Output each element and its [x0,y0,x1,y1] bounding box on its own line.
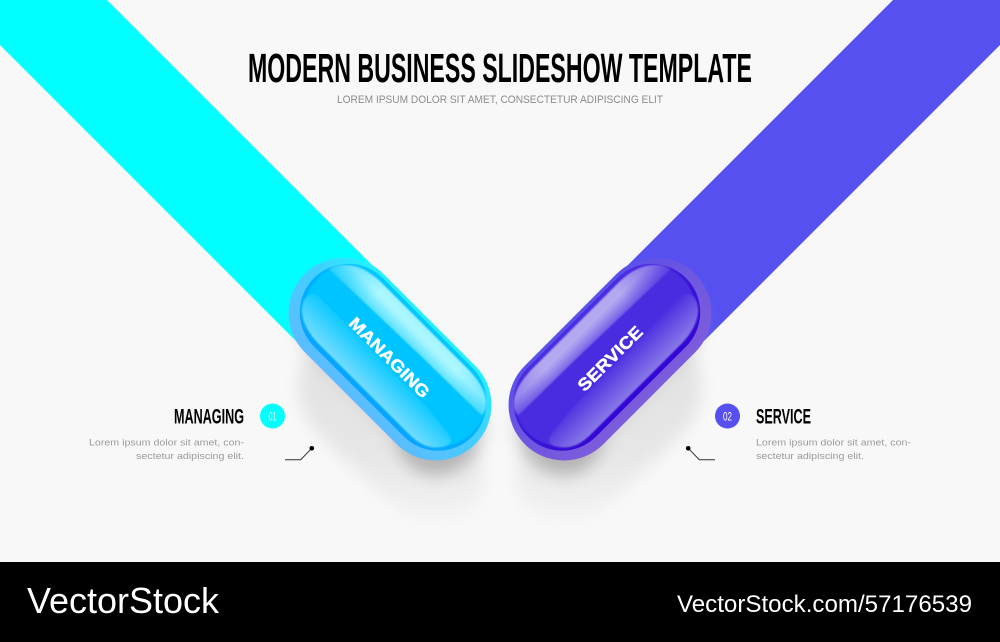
right description [756,438,911,462]
right glossy capsule [508,258,712,460]
left description: sectetur adipiscing elit. [136,451,244,462]
left glossy capsule [288,258,492,460]
left description [89,438,244,462]
left description: Lorem ipsum dolor sit amet, con- [89,438,244,448]
subtitle: LOREM IPSUM DOLOR SIT AMET, CONSECTETUR ADIPISCING ELIT [337,94,663,106]
footer bar [0,562,1000,642]
label: SERVICE on capsule: SERVICE [574,322,647,395]
badge 02: 02 [723,410,732,424]
badge 01 [260,404,285,428]
left connector line [285,446,314,460]
footer logo text: VectorStock [27,580,220,621]
right connector line [686,446,715,460]
badge 01: 01 [268,410,277,424]
purple diagonal band [573,0,1000,365]
right description: Lorem ipsum dolor sit amet, con- [756,438,911,448]
badge 02 [715,404,740,428]
footer url text: VectorStock.com/57176539 [677,591,972,618]
cyan diagonal band [0,0,427,365]
right description: sectetur adipiscing elit. [756,451,864,462]
left heading: MANAGING [174,406,244,428]
label: MANAGING on capsule: MANAGING [345,314,433,402]
right heading: SERVICE [756,406,811,428]
shadow under left capsule [285,269,499,522]
shadow under right capsule [501,269,715,522]
